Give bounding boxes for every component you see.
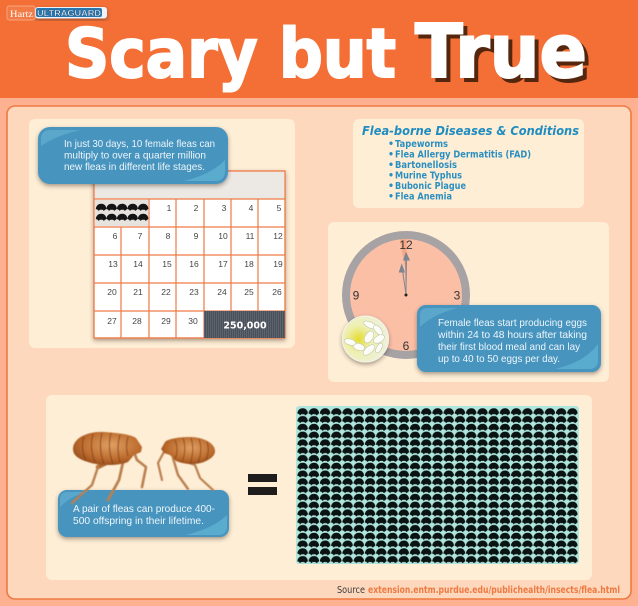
diseases list: Tapeworms [395, 139, 448, 150]
diseases list: • [388, 139, 394, 150]
calendar day numbers: 17 [218, 259, 228, 269]
calendar day numbers: 24 [217, 287, 227, 297]
calendar day numbers: 29 [161, 316, 171, 326]
callout: egg laying: within 24 to 48 hours after taking [437, 330, 587, 341]
diseases list: Bubonic Plague [395, 181, 466, 192]
calendar day numbers: 27 [107, 316, 117, 326]
calendar day numbers: 28 [132, 316, 142, 326]
diseases list: • [388, 170, 394, 182]
diseases list: • [388, 192, 394, 202]
callout: 30 days: In just 30 days, 10 female fleas can [64, 139, 215, 150]
panel: 30-day calendar [29, 119, 295, 348]
diseases list: • [388, 181, 394, 192]
flea offspring grid [296, 406, 579, 564]
logo: Hartz UltraGuard: ULTRAGUARD [37, 8, 101, 18]
title: True [419, 13, 591, 99]
calendar day numbers: 3 [222, 203, 227, 213]
title: Scary but [65, 15, 396, 94]
calendar day numbers: 4 [249, 203, 254, 213]
callout: egg laying: Female fleas start producing eggs [438, 318, 587, 329]
starting fleas [96, 204, 148, 221]
calendar day numbers: 30 [188, 316, 198, 326]
calendar day numbers: 12 [273, 231, 283, 241]
calendar day numbers: 7 [138, 231, 143, 241]
logo: Hartz UltraGuard: Hartz [10, 10, 33, 20]
icon: left flea [72, 432, 146, 503]
calendar day numbers: 22 [161, 287, 171, 297]
panel: flea-borne diseases [353, 119, 584, 208]
clock: 12 [399, 238, 413, 252]
callout: 30 days [38, 127, 228, 184]
diseases list: • [388, 150, 394, 160]
calendar day numbers: 10 [218, 231, 228, 241]
calendar day numbers: 8 [166, 231, 171, 241]
total cell: 250,000 [204, 311, 285, 338]
calendar day numbers: 26 [272, 287, 282, 297]
diseases list: Flea Anemia [395, 192, 452, 202]
logo: Hartz UltraGuard [7, 6, 107, 20]
panel: egg production clock [328, 222, 609, 382]
calendar day numbers: 9 [194, 231, 199, 241]
diseases list [388, 139, 531, 202]
clock [342, 231, 470, 359]
calendar day numbers: 2 [194, 203, 199, 213]
diseases list: Bartonellosis [395, 160, 457, 171]
diseases list: • [388, 160, 394, 171]
clock: 6 [403, 339, 410, 353]
equals sign [248, 474, 277, 495]
callout: 30 days: multiply to over a quarter million [64, 150, 206, 162]
clock: 3 [454, 288, 461, 302]
title [65, 9, 591, 99]
calendar day numbers: 20 [107, 287, 117, 297]
calendar day numbers: 19 [273, 259, 283, 269]
calendar day numbers: 11 [246, 231, 255, 241]
calendar day numbers: 1 [167, 203, 172, 213]
calendar day numbers: 25 [244, 287, 254, 297]
diseases list: Murine Typhus [395, 170, 462, 182]
panel: offspring [46, 395, 592, 580]
clock hands [399, 252, 410, 296]
calendar day numbers [107, 203, 283, 326]
callout: egg laying: up to 40 to 50 eggs per day. [438, 354, 560, 365]
callout: 30 days: new fleas in different life stages. [64, 162, 205, 173]
calendar day numbers: 5 [277, 203, 282, 213]
diseases list: Flea Allergy Dermatitis (FAD) [395, 150, 531, 160]
title: True [415, 9, 587, 95]
callout: offspring: A pair of fleas can produce 400- [73, 504, 215, 515]
callout: offspring: 500 offspring in their lifetime. [73, 516, 204, 527]
icon: flea eggs [342, 316, 388, 362]
header band [0, 0, 638, 98]
calendar day numbers: 15 [162, 259, 172, 269]
calendar day numbers: 6 [113, 231, 118, 241]
main panel [7, 106, 631, 599]
calendar day numbers: 21 [133, 287, 143, 297]
total cell: 250,000: 250,000 [223, 320, 267, 332]
calendar day numbers: 18 [244, 259, 254, 269]
source line: Source [337, 585, 365, 596]
calendar day numbers: 16 [189, 259, 199, 269]
callout: egg laying [417, 305, 601, 372]
icon: right flea [158, 437, 215, 490]
callout: offspring [58, 490, 229, 537]
calendar [94, 171, 285, 338]
calendar day numbers: 14 [133, 259, 143, 269]
clock: 9 [353, 288, 360, 302]
calendar day numbers: 23 [189, 287, 199, 297]
calendar day numbers: 13 [108, 259, 118, 269]
diseases heading: Flea-borne Diseases & Conditions [362, 123, 579, 138]
callout: egg laying: their first blood meal and can lay [438, 342, 581, 353]
